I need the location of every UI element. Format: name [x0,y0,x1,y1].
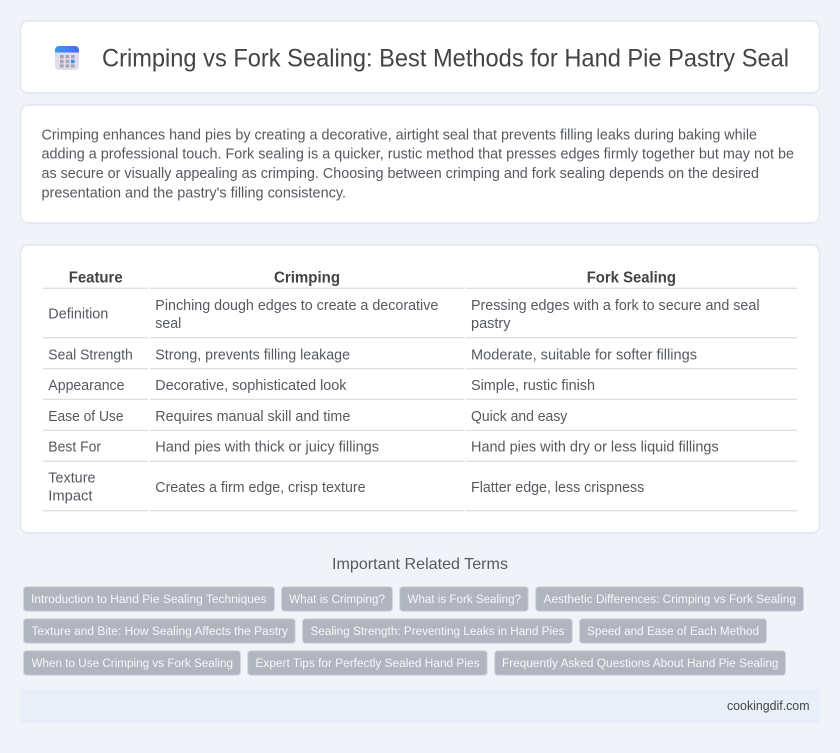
tag: Expert Tips for Perfectly Sealed Hand Pies [256,656,480,670]
table row: appearance: Decorative, sophisticated look [155,378,347,394]
tag [24,651,240,675]
tag: What is Fork Sealing? [408,592,521,606]
table header row: Crimping [274,270,340,287]
tag: When to Use Crimping vs Fork Sealing [32,656,233,670]
table row: texture impact: Flatter edge, less crispness [471,480,644,496]
tag: What is Crimping? [289,592,385,606]
tag [580,619,766,643]
table row: ease of use: Requires manual skill and time [155,409,350,425]
panel: introduction paragraph [20,105,820,223]
table row: best for [48,440,719,456]
tag: Frequently Asked Questions About Hand Pie Sealing [502,656,778,670]
tag [282,587,392,611]
table row: definition: Definition [48,307,108,323]
tag: Texture and Bite: How Sealing Affects the Pastry [32,624,289,638]
text block: introduction: presentation and the pastry's filling consistency. [42,185,346,201]
panel: title header [20,21,820,93]
footer source text: cookingdif.com [727,698,810,713]
table row: texture impact: Impact [48,489,93,505]
table row: definition: Pinching dough edges to create a decorative [155,298,438,314]
table row: ease of use: Quick and easy [471,409,568,425]
heading: important related terms: Important Related Terms [332,556,508,573]
table row: seal strength: Seal Strength [48,347,133,363]
tag list: related terms [24,587,804,675]
table row: appearance: Appearance [48,378,124,394]
tag [248,651,487,675]
table header row [69,270,676,287]
tag [302,619,572,643]
table row: definition: seal [155,316,181,332]
table row: seal strength: Strong, prevents filling leakage [155,347,350,363]
text block: introduction: adding a professional touch. Fork sealing is a quicker, rustic method that presses edges firmly together but may not be [42,147,794,163]
table row: texture impact [48,471,644,505]
table row: appearance [48,378,595,394]
table row: best for: Best For [48,440,101,456]
tag: Aesthetic Differences: Crimping vs Fork Sealing [544,592,796,606]
table row: best for: Hand pies with dry or less liquid fillings [471,440,719,456]
table row: texture impact: Creates a firm edge, crisp texture [155,480,366,496]
table row: definition: pastry [471,316,511,332]
table row: seal strength [48,347,697,363]
text block: introduction [42,127,794,201]
panel: comparison table [20,245,820,533]
footer bar [20,689,820,723]
tag [400,587,528,611]
table header row: Fork Sealing [587,270,676,287]
title: Crimping vs Fork Sealing: Best Methods for Hand Pie Pastry Seal [102,45,789,73]
table row: definition [48,298,760,332]
table header row: Feature [69,270,123,287]
table row: seal strength: Moderate, suitable for softer fillings [471,347,697,363]
table row: ease of use: Ease of Use [48,409,123,425]
table row: appearance: Simple, rustic finish [471,378,595,394]
tag: Sealing Strength: Preventing Leaks in Hand Pies [310,624,564,638]
text block: introduction: Crimping enhances hand pies by creating a decorative, airtight seal that prevents filling leaks during baking while [42,127,757,143]
tag [495,651,786,675]
text block: introduction: as secure or visually appealing as crimping. Choosing between crimping and fork sealing depends on the desired [42,166,759,182]
icon: calendar [55,46,79,70]
tag: Speed and Ease of Each Method [587,624,759,638]
tag: Introduction to Hand Pie Sealing Techniques [31,592,266,606]
tag [24,587,274,611]
table row: best for: Hand pies with thick or juicy fillings [155,440,379,456]
table row: ease of use [48,409,568,425]
table row: definition: Pressing edges with a fork to secure and seal [471,298,760,314]
tag [536,587,804,611]
table row: texture impact: Texture [48,471,96,487]
tag [24,619,295,643]
